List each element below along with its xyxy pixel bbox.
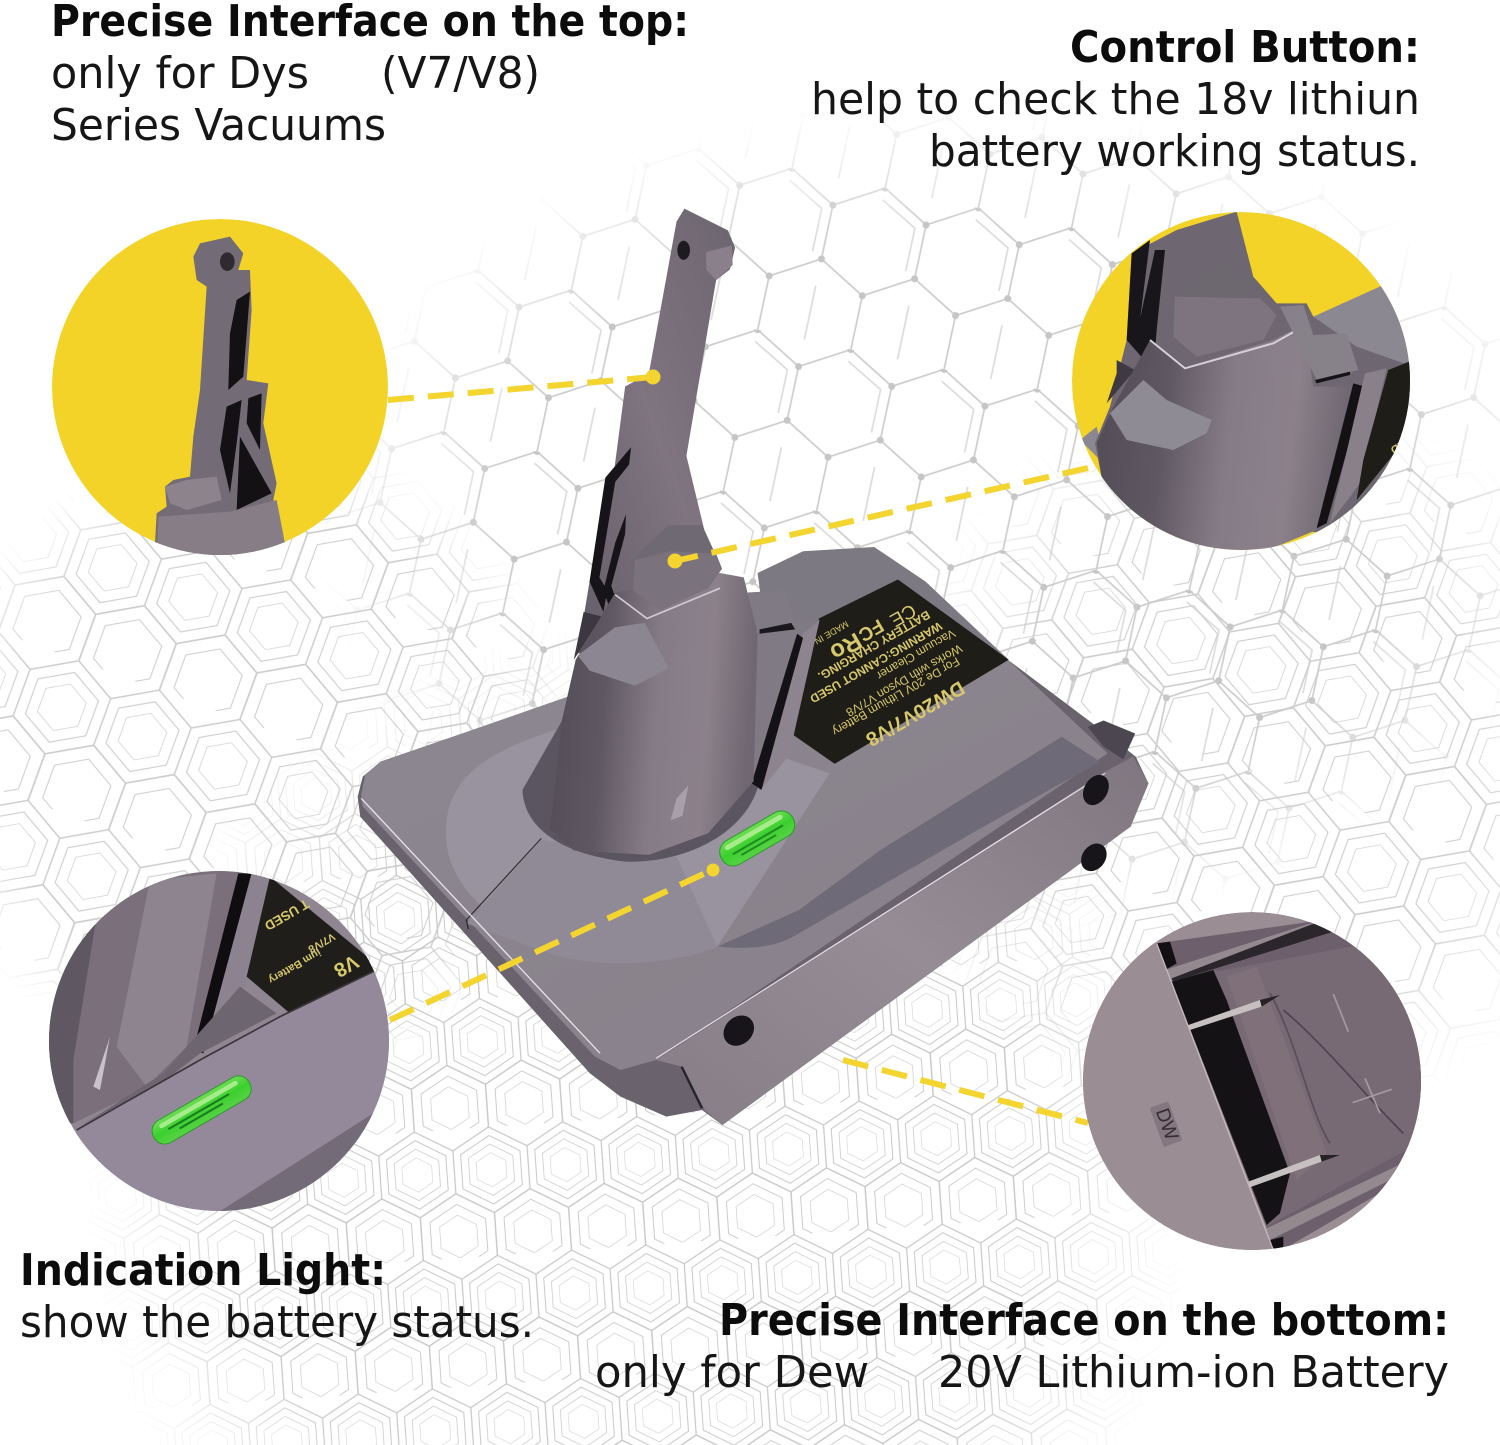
connector: control button xyxy=(668,468,1088,568)
circle callout: indication light close-up xyxy=(43,870,403,1227)
metal pins xyxy=(1188,1000,1262,1030)
circle callout: indication light close-up: ium Battery xyxy=(266,946,323,986)
stem close-up xyxy=(43,870,243,1123)
battery adapter product image xyxy=(358,209,1148,1125)
label text: Works with Dyson V7/V8 xyxy=(843,641,965,720)
text block: precise interface top xyxy=(51,0,689,151)
circle callout: top interface on yellow xyxy=(52,219,388,563)
interface latch close-up xyxy=(155,237,285,563)
battery base body xyxy=(358,660,1148,1125)
text block: control button: help to check the 18v lithiun xyxy=(811,74,1420,125)
connector: indication light xyxy=(390,864,720,1020)
connector cavity xyxy=(1157,920,1437,1253)
handle, stem and button xyxy=(550,209,820,855)
side rail xyxy=(748,590,819,790)
connector: top interface to handle xyxy=(388,370,660,400)
label text: WARNING:CANNOT USED xyxy=(807,619,944,706)
label text: Ro xyxy=(825,627,866,666)
text block: precise interface top: Series Vacuums xyxy=(51,100,386,151)
button close-up xyxy=(1168,258,1277,357)
stem close-up xyxy=(1097,327,1353,553)
label text: For De 20V Lithium Battery xyxy=(830,654,962,739)
text block: precise interface bottom: 20V Lithium-ion Battery xyxy=(938,1347,1449,1398)
base face close-up xyxy=(80,987,277,1127)
text block: indication light: Indication Light: xyxy=(20,1245,386,1296)
warning label plate xyxy=(791,579,1009,764)
circle callout: indication light close-up: V8 xyxy=(330,950,362,981)
label text: DW20V7/V8 xyxy=(862,676,968,750)
connector: lower right circle to battery base xyxy=(843,1060,1088,1123)
circle callout: control button close-up xyxy=(1072,212,1441,553)
text block: precise interface bottom: only for Dew xyxy=(595,1347,869,1398)
label text: MADE IN xyxy=(813,619,850,646)
indicator close-up xyxy=(152,1075,252,1145)
screw holes xyxy=(719,773,1113,1048)
stem xyxy=(550,573,758,855)
circle callout: indication light close-up: V7/V8 xyxy=(306,930,337,955)
label text: CE xyxy=(886,599,919,630)
rail close-up xyxy=(193,873,252,1053)
text block: precise interface top: (V7/V8) xyxy=(381,48,540,99)
text block: control button: Control Button: xyxy=(1070,22,1420,73)
handle backing xyxy=(1095,212,1413,553)
embossed DW mark: DW xyxy=(1151,1106,1182,1144)
polarity marks xyxy=(1333,994,1392,1113)
text block: precise interface bottom xyxy=(595,1295,1449,1398)
circle callout: control button close-up: RO xyxy=(1406,388,1441,421)
label close-up xyxy=(247,877,383,1013)
label text: FC xyxy=(854,614,887,645)
label corner xyxy=(1357,360,1413,500)
circle callout: control button close-up: USED xyxy=(1388,430,1421,456)
text block: indication light xyxy=(20,1245,534,1348)
text block: control button: battery working status. xyxy=(929,126,1420,177)
control button xyxy=(631,525,722,610)
label text: BATTERY CHARGING. xyxy=(815,608,933,683)
rail close-up xyxy=(1280,305,1358,380)
indicator light xyxy=(715,806,800,871)
frame rails xyxy=(1165,923,1323,980)
text block: indication light: show the battery status. xyxy=(20,1297,534,1348)
label text xyxy=(807,599,968,750)
circle callout: bottom interface close-up xyxy=(1083,912,1421,1250)
text block: precise interface top: only for Dys xyxy=(51,48,309,99)
label text: Vacuum Cleaner xyxy=(874,626,958,683)
circle callout: indication light close-up: T USED xyxy=(262,896,312,934)
text block: control button xyxy=(811,22,1420,177)
latch arm xyxy=(578,209,735,653)
rear body and label xyxy=(758,547,1135,764)
left face xyxy=(1083,942,1272,1250)
